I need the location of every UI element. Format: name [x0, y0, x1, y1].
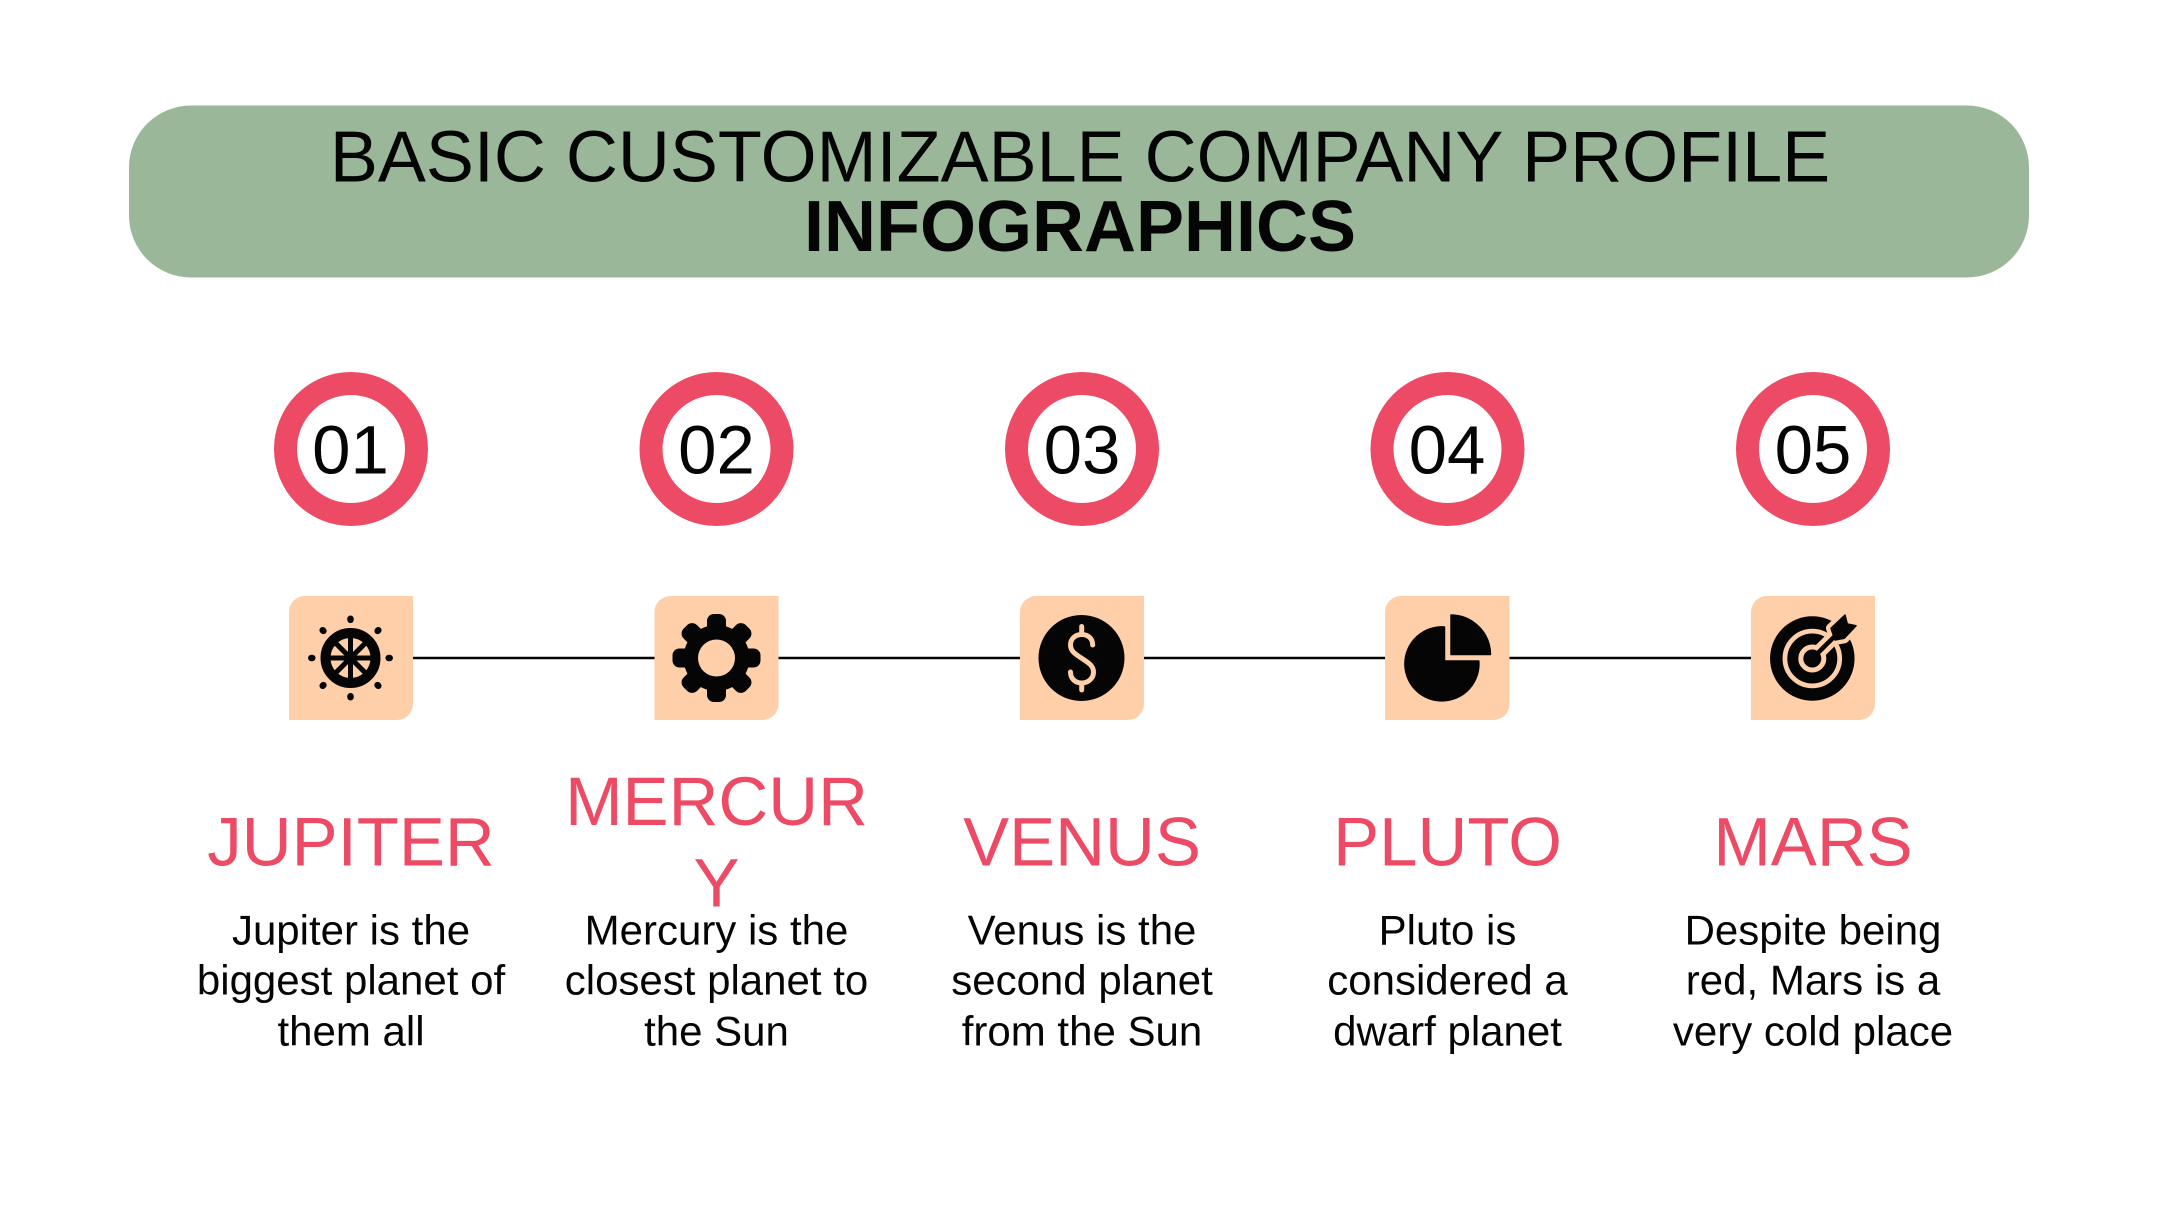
heading: Mercury — [565, 763, 868, 922]
number badge 01 — [286, 384, 416, 514]
text: Mars description: red, Mars is a — [1686, 956, 1941, 1004]
text: Mars description: very cold place — [1673, 1008, 1953, 1054]
panel: step 03 Venus — [951, 384, 1213, 1054]
text: Mars description: Despite being — [1685, 906, 1941, 954]
text: Pluto description: considered a — [1327, 956, 1568, 1004]
text: Pluto description: dwarf planet — [1333, 1008, 1562, 1054]
icon: pie chart — [1385, 596, 1510, 720]
text: Venus description: from the Sun — [962, 1008, 1202, 1054]
title text: BASIC CUSTOMIZABLE COMPANY PROFILE — [330, 118, 1830, 198]
text: Venus description: second planet — [951, 956, 1213, 1004]
number badge 05: 05 — [1775, 412, 1851, 488]
text: Jupiter description — [197, 906, 505, 1054]
heading: Jupiter: JUPITER — [207, 804, 495, 880]
number badge 02: 02 — [678, 412, 755, 488]
heading: Mercury: MERCUR — [565, 763, 868, 840]
number badge 04 — [1382, 384, 1513, 514]
icon: target with dart — [1751, 596, 1875, 720]
number badge 03: 03 — [1044, 412, 1120, 488]
icon: gear — [654, 596, 778, 720]
text: Mercury description: Mercury is the — [585, 906, 848, 954]
text: Pluto description — [1327, 906, 1568, 1054]
heading: Pluto: PLUTO — [1333, 804, 1562, 880]
text: Mercury description — [565, 906, 868, 1054]
panel: step 02 Mercury — [565, 384, 868, 1054]
text: Mars description — [1673, 906, 1953, 1054]
number badge 05 — [1748, 384, 1878, 514]
text: Jupiter description: them all — [277, 1008, 425, 1054]
heading: Mercury: Y — [693, 844, 740, 922]
number badge 04: 04 — [1409, 412, 1485, 488]
number badge 01: 01 — [312, 412, 389, 488]
icon: ship wheel — [289, 596, 413, 720]
panel: step 04 Pluto — [1327, 384, 1568, 1054]
text: Mercury description: the Sun — [644, 1008, 789, 1054]
icon: dollar coin — [1020, 596, 1144, 720]
text: Jupiter description: biggest planet of — [197, 956, 505, 1004]
text: Jupiter description: Jupiter is the — [232, 906, 470, 954]
text: Venus description: Venus is the — [968, 906, 1196, 954]
panel: step 01 Jupiter — [197, 384, 505, 1054]
text: Venus description — [951, 906, 1213, 1054]
text: Mercury description: closest planet to — [565, 956, 868, 1004]
heading: Venus: VENUS — [963, 804, 1201, 880]
text: Pluto description: Pluto is — [1379, 906, 1516, 954]
number badge 02 — [651, 384, 782, 514]
title text: INFOGRAPHICS — [804, 187, 1356, 267]
title banner — [129, 106, 2029, 278]
title text — [330, 118, 1830, 267]
panel: step 05 Mars — [1673, 384, 1953, 1054]
heading: Mars: MARS — [1713, 804, 1913, 880]
number badge 03 — [1016, 384, 1148, 514]
